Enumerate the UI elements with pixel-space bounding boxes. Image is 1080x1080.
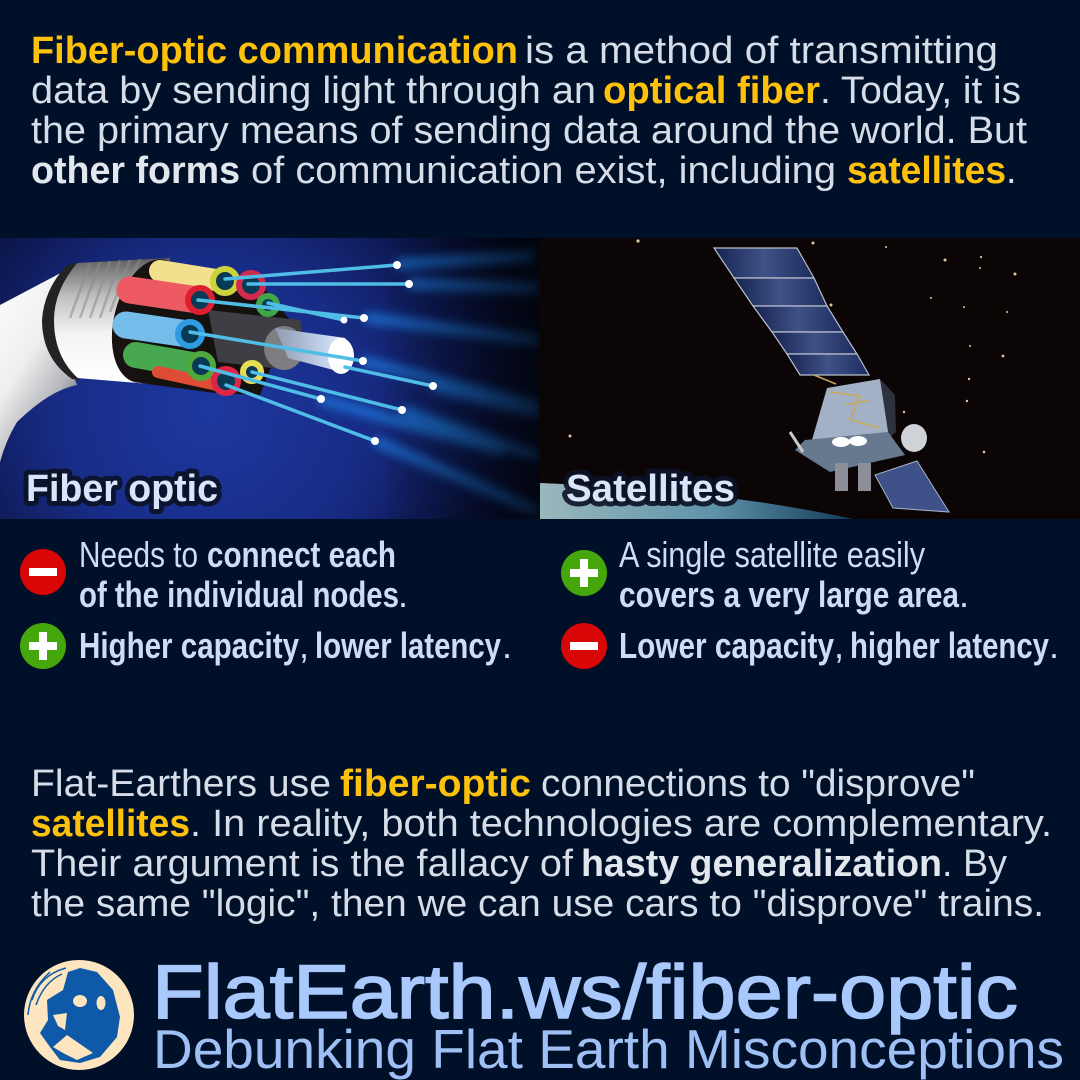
right edge darkening [380, 238, 540, 519]
satellite drawback text: Lower capacity [619, 625, 834, 666]
satellite benefit text: covers a very large area [619, 574, 960, 615]
intro paragraph: satellites [847, 150, 1006, 192]
fiber benefit text: Higher capacity [79, 625, 299, 666]
footer tagline: Debunking Flat Earth Misconceptions [153, 1018, 1064, 1080]
lower solar array [875, 461, 949, 512]
intro paragraph: . Today, it is [820, 70, 1021, 112]
fiber drawback text: connect each [207, 534, 396, 575]
fiber benefit text [79, 625, 512, 666]
fiber drawback text: of the individual nodes [79, 574, 399, 615]
optical fibers [190, 265, 433, 441]
thrusters [835, 463, 871, 491]
fiber drawback text: . [398, 574, 408, 615]
light beams [323, 256, 535, 510]
cable jacket [0, 267, 77, 462]
fiber drawback text: Needs to [79, 534, 198, 575]
upper solar array [714, 248, 869, 375]
boom [814, 375, 836, 384]
satellite drawback text [619, 625, 1059, 666]
inner core cylinder [208, 310, 302, 370]
satellite drawback text: . [1049, 625, 1059, 666]
glass core [275, 328, 346, 370]
icon: plus, fiber capacity [20, 623, 66, 669]
satellite body [812, 379, 890, 440]
icon: plus, satellite coverage [561, 550, 607, 596]
closing paragraph [31, 763, 1052, 925]
label: satellites: Satellites [566, 468, 735, 510]
icon: flat earth globe logo [24, 960, 134, 1070]
dark interior [140, 289, 289, 395]
black band [42, 262, 80, 380]
footer url: FlatEarth.ws/fiber-optic [152, 950, 1018, 1035]
intro paragraph: optical fiber [603, 70, 820, 112]
closing paragraph: satellites [31, 803, 190, 845]
panel: fiber optic image [0, 238, 540, 519]
panel: satellite image [540, 238, 1080, 519]
earth limb [540, 483, 853, 519]
intro paragraph: data by sending light through an [31, 70, 596, 112]
equipment deck [795, 432, 905, 472]
closing paragraph: . In reality, both technologies are complementary. [190, 803, 1052, 845]
closing paragraph: Flat-Earthers use [31, 763, 331, 805]
dish antenna [901, 424, 927, 452]
fiber benefit text: , [299, 625, 309, 666]
satellite drawback text: , [834, 625, 844, 666]
intro paragraph: the primary means of sending data around the world. But [31, 110, 1027, 152]
icon: minus, fiber nodes [20, 549, 66, 595]
intro paragraph [31, 30, 1027, 192]
closing paragraph: the same "logic", then we can use cars to "disprove" trains. [31, 883, 1044, 925]
stars [568, 239, 1016, 453]
intro paragraph: is a method of transmitting [525, 30, 998, 72]
threaded sheath [52, 258, 170, 384]
closing paragraph: fiber-optic [340, 763, 531, 805]
fiber benefit text: lower latency [315, 625, 501, 666]
satellite benefit text: A single satellite easily [619, 534, 925, 575]
fiber tips [317, 261, 437, 445]
fiber drawback text [79, 534, 408, 615]
closing paragraph: hasty generalization [581, 843, 942, 885]
intro paragraph: Fiber-optic communication [31, 30, 518, 72]
icon: minus, satellite capacity [561, 623, 607, 669]
intro paragraph: other forms [31, 150, 240, 192]
closing paragraph: Their argument is the fallacy of [31, 843, 573, 885]
satellite benefit text: . [959, 574, 969, 615]
cable opening [112, 259, 170, 383]
intro paragraph: . [1006, 150, 1017, 192]
fiber benefit text: . [502, 625, 512, 666]
closing paragraph: . By [942, 843, 1007, 885]
label: fiber optic: Fiber optic [26, 468, 218, 510]
closing paragraph: connections to "disprove" [541, 763, 975, 805]
intro paragraph: of communication exist, including [251, 150, 836, 192]
fiber tubes [126, 271, 222, 386]
tube rings [178, 269, 277, 393]
satellite benefit text [619, 534, 969, 615]
